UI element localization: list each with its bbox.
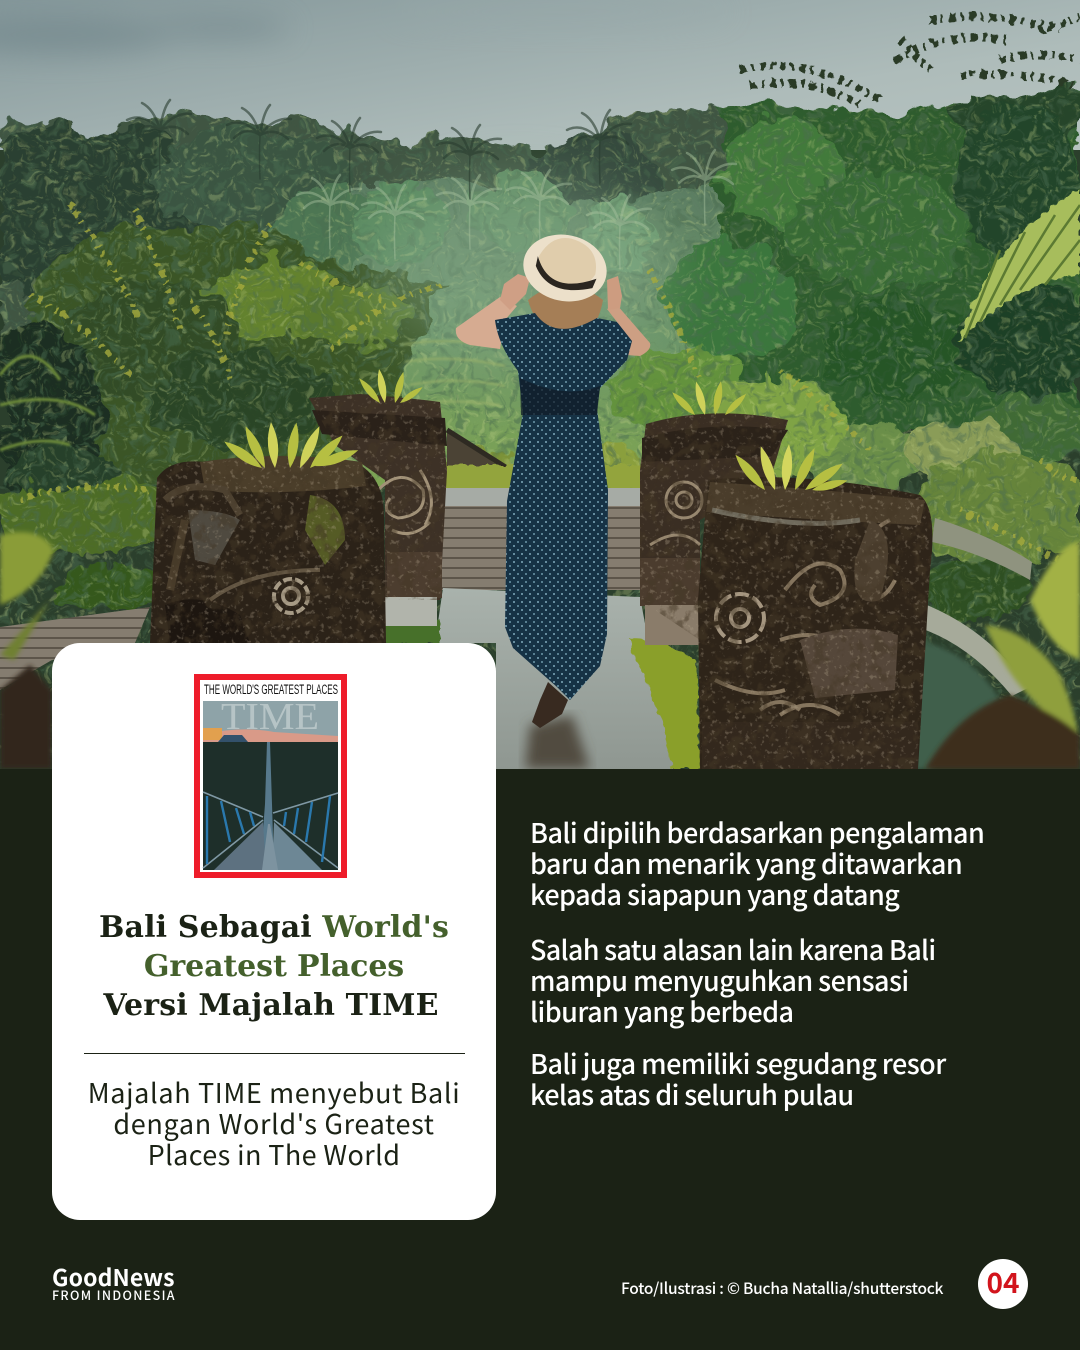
masthead TIME: TIME: [221, 696, 319, 738]
stone path: [435, 588, 677, 769]
far stone curb: [445, 488, 643, 507]
foreground right leaves: [925, 542, 1080, 769]
wet reflection of woman: [525, 715, 590, 769]
woman in polka dot dress with straw hat: [456, 227, 650, 728]
plant: left back pot: [357, 368, 424, 405]
card description: Places in The World: [148, 1134, 400, 1173]
right pool: [905, 640, 1000, 769]
paragraph 2: [530, 929, 935, 1030]
card heading: [99, 910, 449, 1023]
card description: Majalah TIME menyebut Bali: [88, 1072, 460, 1111]
valley haze: [370, 180, 670, 360]
palms in valley: [297, 150, 736, 269]
logo: GoodNews from Indonesia: GoodNews: [52, 1259, 175, 1293]
plant: left front pot: [221, 422, 360, 472]
upper right sparse branches: [740, 17, 1080, 105]
card heading: Greatest Places: [144, 949, 404, 984]
paragraph 1: baru dan menarik yang ditawarkan: [530, 843, 962, 882]
paragraph 3: [530, 1043, 946, 1113]
bridge deck left: [214, 822, 266, 870]
gathered waist shadow: [520, 378, 600, 415]
yellow plants on pots: [221, 368, 849, 494]
left bush mass: [20, 224, 450, 490]
flower carving: [274, 579, 308, 613]
paragraph 2: mampu menyuguhkan sensasi: [530, 960, 909, 999]
vegetation layers with organic edges: [0, 70, 1080, 620]
paragraph 2: Salah satu alasan lain karena Bali: [530, 929, 935, 968]
base stone: [645, 605, 700, 645]
hands: [500, 274, 530, 310]
rice terraces: [400, 341, 505, 405]
hat: [517, 227, 613, 309]
paragraph 2: liburan yang berbeda: [530, 991, 794, 1030]
railings: [203, 792, 338, 868]
carved scrolls: [715, 520, 895, 715]
card description: dengan World's Greatest: [113, 1103, 435, 1142]
right tree masses: [720, 85, 1080, 430]
photo credit: Foto/Ilustrasi : © Bucha Natallia/shutterstock: [621, 1277, 943, 1299]
yellow sprigs in left bush: [20, 205, 1078, 560]
paragraph 3: kelas atas di seluruh pulau: [530, 1074, 853, 1113]
sky: [0, 0, 1080, 300]
bridge tower and road: [260, 742, 274, 870]
card divider: [84, 1053, 465, 1054]
left back stone pot: [309, 394, 447, 626]
card description: [88, 1072, 460, 1173]
logo: GoodNews from Indonesia: FROM INDONESIA: [52, 1285, 176, 1304]
card heading: Versi Majalah TIME: [103, 988, 439, 1023]
arms: [456, 297, 517, 349]
stone surface texture: [150, 394, 932, 769]
plant: right front pot: [732, 444, 849, 494]
garden curb: [932, 518, 1032, 580]
foreground left leaves and pot: [0, 532, 54, 769]
left dark fern: [0, 356, 95, 450]
yellow grass behind deck: [445, 465, 645, 489]
plant: right back pot: [670, 380, 748, 417]
right back stone pot: [640, 413, 788, 645]
background photo: woman at Bali temple garden: [0, 0, 1080, 769]
bridge deck right: [272, 822, 322, 870]
magazine cover: TIME, the world's greatest places: [194, 674, 347, 878]
mid right foliage: [610, 348, 750, 432]
distant treeline: [0, 100, 800, 360]
left wooden deck: [0, 607, 150, 690]
left front stone pot: [150, 456, 386, 643]
elephant ear carving: [188, 510, 240, 565]
card heading: Bali Sebagai World's: [99, 910, 449, 945]
grass along path: [630, 637, 700, 769]
carved flower: [716, 594, 764, 642]
page number badge: [978, 1259, 1028, 1309]
base stone: [385, 597, 437, 626]
white info card: [52, 643, 496, 1220]
paragraph 1: Bali dipilih berdasarkan pengalaman: [530, 812, 984, 851]
sandal and foot: [532, 682, 568, 728]
hair: [528, 285, 603, 340]
right front stone pot: [698, 477, 932, 769]
pool curb: [920, 603, 1028, 696]
wooden stair rail: [447, 430, 507, 477]
vegetation base fill: [0, 150, 1080, 769]
paragraph 1: [530, 812, 984, 913]
paragraph 1: kepada siapapun yang datang: [530, 874, 899, 913]
page number badge: 04: [986, 1262, 1020, 1302]
wooden deck: [442, 506, 642, 590]
leaf speckle: [0, 100, 1080, 620]
palm frond: [958, 188, 1080, 342]
carved haunch: [800, 629, 898, 698]
right column text: [530, 812, 984, 1113]
paragraph 3: Bali juga memiliki segudang resor: [530, 1043, 946, 1082]
dress: [495, 313, 632, 700]
